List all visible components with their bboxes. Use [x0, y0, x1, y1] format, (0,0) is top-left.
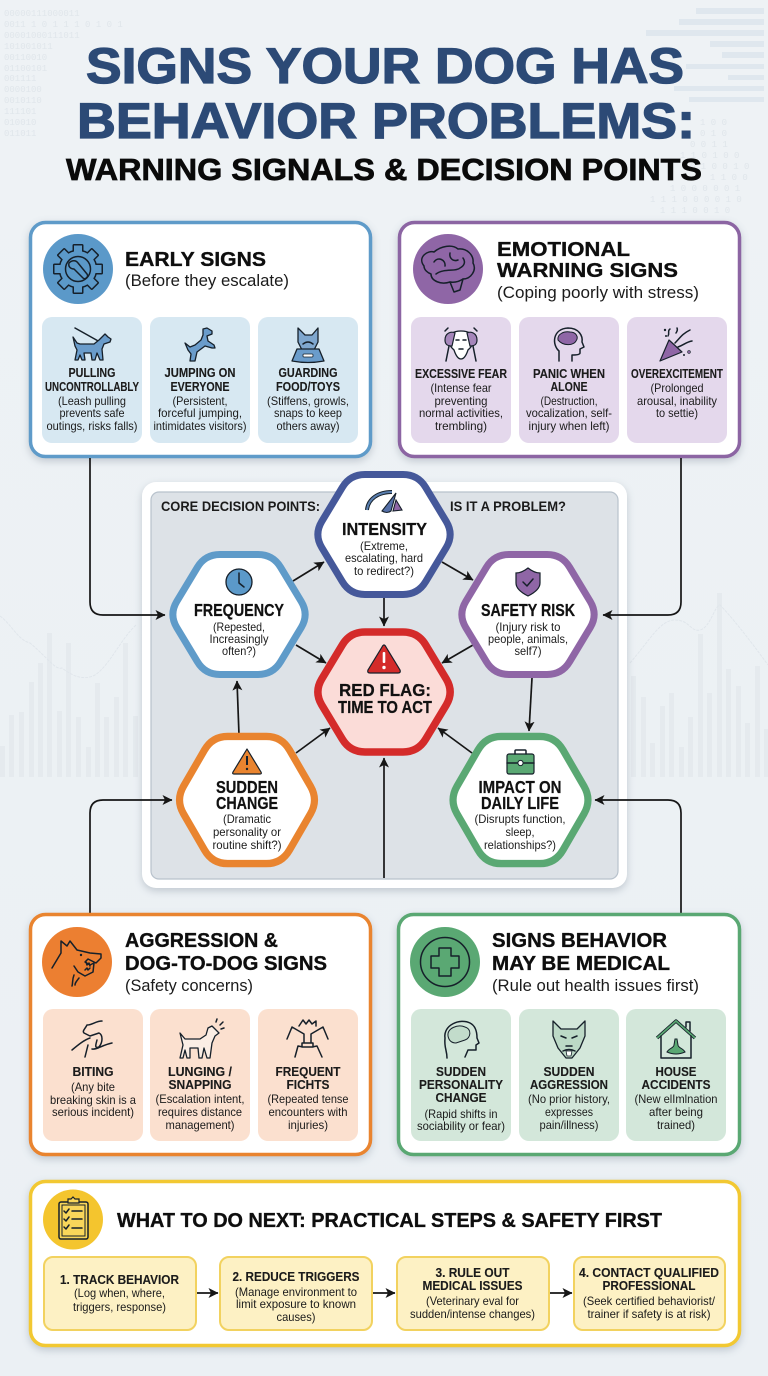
icon: orange warning triangle: [233, 749, 261, 774]
icon: red warning triangle: [368, 645, 400, 673]
tile: jumping on everyone: JUMPING ON: [164, 366, 236, 380]
tile: house accidents: ACCIDENTS: [642, 1078, 710, 1092]
background: 0 1 0 0 1 0: [690, 162, 749, 172]
hexagon: red flag: RED FLAG:: [339, 680, 431, 700]
tile: guarding food/toys: others away): [276, 419, 340, 433]
background: 0 1 0: [700, 129, 727, 139]
background: 1 0 0 0 0 0 1: [670, 184, 740, 194]
hexagon: sudden change: CHANGE: [216, 793, 278, 813]
heading: medical: SIGNS BEHAVIOR: [492, 929, 667, 952]
tile: sudden aggression: AGGRESSION: [530, 1078, 608, 1092]
icon: brain: [413, 234, 483, 304]
icon: jumping dog: [185, 328, 215, 361]
step 1: (Log when, where,: [74, 1286, 165, 1300]
tile: lunging / snapping: SNAPPING: [168, 1078, 232, 1092]
heading: emotional warning signs: WARNING SIGNS: [497, 259, 678, 282]
tile: excessive fear: [411, 317, 511, 443]
tile: house accidents: (New elImlnation: [634, 1092, 718, 1106]
heading: medical: (Rule out health issues first): [492, 977, 699, 995]
hexagon: frequency: FREQUENCY: [194, 600, 284, 620]
step 4: PROFESSIONAL: [602, 1279, 696, 1293]
panel: early signs: [30, 222, 370, 456]
tile: lunging / snapping: (Escalation intent,: [156, 1092, 244, 1106]
tile: pulling uncontrollably: outings, risks falls): [46, 419, 138, 433]
hexagon: sudden change: (Dramatic: [223, 812, 271, 826]
icon: scared dog face: [445, 328, 477, 361]
tile: overexcitement: (Prolonged: [650, 381, 704, 395]
step 4: (Seek certified behaviorist/: [583, 1294, 716, 1308]
tile: frequent fights: encounters with: [268, 1105, 348, 1119]
background: 001111: [4, 74, 36, 84]
tile: sudden personality change: PERSONALITY: [419, 1078, 504, 1092]
tile: sudden aggression: expresses: [545, 1105, 593, 1119]
arrows between decision points: [237, 562, 532, 878]
tile: sudden personality change: sociability or fear): [417, 1119, 505, 1133]
tile: lunging / snapping: management): [166, 1118, 234, 1132]
icon: head with brain: [555, 328, 584, 361]
hexagon: impact on daily life: sleep,: [506, 825, 534, 839]
background: 1 0 0: [700, 118, 727, 128]
tile: panic when alone: vocalization, self-: [526, 406, 612, 420]
tile: biting: serious incident): [52, 1105, 134, 1119]
tile: jumping on everyone: forceful jumping,: [158, 406, 242, 420]
tile: house accidents: [626, 1009, 726, 1141]
tile: sudden aggression: (No prior history,: [528, 1092, 610, 1106]
tile: excessive fear: preventing: [434, 394, 488, 408]
arrow: step 3 to 4: [550, 1292, 572, 1294]
tile: guarding food/toys: snaps to keep: [274, 406, 342, 420]
hexagon: red flag: [318, 632, 450, 752]
step 1: triggers, response): [73, 1300, 166, 1314]
tile: excessive fear: (Intense fear: [430, 381, 492, 395]
hexagon: impact on daily life: IMPACT ON: [478, 777, 562, 797]
step 3: sudden/intense changes): [410, 1307, 535, 1321]
heading: is it a problem: IS IT A PROBLEM?: [450, 498, 566, 514]
tile: sudden personality change: [411, 1009, 511, 1141]
hexagon: intensity: [318, 474, 450, 594]
hexagon: sudden change: routine shift?): [212, 838, 282, 852]
icon: gear with wrench: [43, 234, 113, 304]
background: 010010: [4, 118, 36, 128]
step 2: limit exposure to known: [236, 1297, 356, 1311]
heading: emotional warning signs: EMOTIONAL: [497, 238, 630, 261]
heading: aggression: [125, 929, 327, 995]
tile: house accidents: HOUSE: [656, 1065, 696, 1079]
tile: panic when alone: (Destruction,: [540, 394, 598, 408]
tile: lunging / snapping: [150, 1009, 250, 1141]
heading: medical: MAY BE MEDICAL: [492, 952, 670, 975]
hexagon: impact on daily life: (Disrupts function,: [474, 812, 566, 826]
tile: overexcitement: OVEREXCITEMENT: [631, 367, 723, 381]
panel: what to do next: [30, 1182, 740, 1346]
hexagon: safety risk: self7): [514, 644, 542, 658]
step 2: 2. REDUCE TRIGGERS: [232, 1270, 360, 1284]
step 3: (Veterinary eval for: [426, 1294, 519, 1308]
icon: snarling dog: [42, 927, 112, 997]
tile: lunging / snapping: LUNGING /: [168, 1065, 233, 1079]
background: 0000100: [4, 85, 42, 95]
icon: bite on arm: [72, 1021, 112, 1057]
hexagon: frequency: (Repested,: [213, 620, 265, 634]
step 3: MEDICAL ISSUES: [422, 1279, 522, 1293]
background: 0010110: [4, 96, 42, 106]
title: WARNING SIGNALS & DECISION POINTS: [66, 153, 702, 187]
heading: early signs: [125, 248, 289, 290]
heading: core decision points: CORE DECISION POINTS:: [161, 498, 320, 514]
hexagon: intensity: INTENSITY: [342, 519, 427, 539]
icon: medical cross: [410, 927, 480, 997]
icon: clock: [226, 569, 252, 595]
heading: aggression: AGGRESSION &: [125, 929, 278, 952]
background: 00000111000011: [4, 9, 80, 19]
hexagon: intensity: to redirect?): [354, 564, 414, 578]
hexagon: impact on daily life: DAILY LIFE: [481, 793, 559, 813]
panel: core decision points: [142, 474, 627, 888]
tile: overexcitement: [627, 317, 727, 443]
hexagon: sudden change: SUDDEN: [216, 777, 278, 797]
connector arrows from cards to core panel: [90, 458, 681, 913]
tile: pulling uncontrollably: PULLING: [68, 366, 116, 380]
step 4: trainer if safety is at risk): [588, 1307, 711, 1321]
heading: emotional warning signs: [497, 238, 699, 302]
tile: biting: [43, 1009, 143, 1141]
hexagon: sudden change: [180, 736, 314, 864]
step 1: [44, 1257, 196, 1330]
title: [66, 38, 702, 187]
hexagon: safety risk: [462, 554, 594, 674]
tile: excessive fear: trembling): [435, 419, 487, 433]
icon: two dogs fighting: [287, 1020, 328, 1057]
tile: panic when alone: ALONE: [550, 380, 588, 394]
tile: excessive fear: EXCESSIVE FEAR: [415, 367, 507, 381]
icon: head with green brain: [445, 1021, 479, 1058]
tile: excessive fear: normal activities,: [419, 406, 503, 420]
step 2: (Manage environment to: [235, 1285, 357, 1299]
icon: shield: [516, 568, 540, 596]
arrow: step 2 to 3: [373, 1292, 395, 1294]
tile: panic when alone: PANIC WHEN: [533, 367, 605, 381]
tile: frequent fights: (Repeated tense: [268, 1092, 349, 1106]
icon: party popper: [660, 328, 692, 361]
background: 00001000111011: [4, 31, 80, 41]
hexagon: frequency: Increasingly: [210, 632, 268, 646]
tile: house accidents: trained): [657, 1118, 695, 1132]
step 4: 4. CONTACT QUALIFIED: [579, 1266, 719, 1280]
step 1: 1. TRACK BEHAVIOR: [60, 1273, 179, 1287]
tile: frequent fights: FICHTS: [286, 1078, 330, 1092]
step 2: [220, 1257, 372, 1330]
tile: sudden personality change: (Rapid shifts in: [424, 1107, 498, 1121]
step 3: [397, 1257, 549, 1330]
icon: clipboard checklist: [43, 1190, 103, 1250]
tile: biting: breaking skin is a: [50, 1093, 136, 1107]
icon: gauge: [367, 492, 402, 512]
heading: aggression: DOG-TO-DOG SIGNS: [125, 952, 327, 975]
tile: sudden aggression: [519, 1009, 619, 1141]
tile: panic when alone: injury when left): [528, 419, 610, 433]
tile: overexcitement: arousal, inability: [637, 394, 717, 408]
hexagon: frequency: often?): [222, 644, 256, 658]
background: 0011 1 0 1 1 1 0 1 0 1: [4, 20, 123, 30]
hexagon: impact on daily life: [453, 736, 588, 864]
hexagon: intensity: (Extreme,: [360, 539, 408, 553]
icon: house with puddle: [657, 1021, 695, 1058]
tile: pulling uncontrollably: prevents safe: [60, 406, 125, 420]
tile: sudden aggression: pain/illness): [540, 1118, 598, 1132]
tile: biting: BITING: [72, 1065, 114, 1079]
background: 00110010: [4, 53, 47, 63]
hexagon: frequency: [173, 554, 305, 674]
tile: lunging / snapping: requires distance: [158, 1105, 242, 1119]
tile: pulling uncontrollably: [42, 317, 142, 443]
tile: sudden personality change: CHANGE: [436, 1091, 486, 1105]
heading: what to do next: WHAT TO DO NEXT: PRACTICAL STEPS & SAFETY FIRST: [117, 1209, 662, 1232]
background: 01100101: [4, 64, 47, 74]
tile: guarding food/toys: GUARDING: [278, 366, 338, 380]
tile: guarding food/toys: [258, 317, 358, 443]
icon: lunging dog: [180, 1019, 224, 1058]
step 2: causes): [276, 1310, 316, 1324]
tile: frequent fights: [258, 1009, 358, 1141]
hexagon: safety risk: people, animals,: [488, 632, 568, 646]
icon: dog and bowl: [292, 328, 324, 362]
arrow: step 1 to 2: [197, 1292, 218, 1294]
heading: early signs: EARLY SIGNS: [125, 248, 266, 271]
step 4: [574, 1257, 725, 1330]
hexagon: safety risk: SAFETY RISK: [481, 600, 575, 620]
background: 111101: [4, 107, 36, 117]
hexagon: sudden change: personality or: [213, 825, 281, 839]
heading: early signs: (Before they escalate): [125, 272, 289, 290]
hexagon: red flag: TIME TO ACT: [338, 697, 432, 717]
icon: briefcase: [507, 750, 534, 774]
tile: jumping on everyone: intimidates visitors): [154, 419, 246, 433]
panel: aggression and dog-to-dog signs: [30, 914, 370, 1154]
tile: pulling uncontrollably: (Leash pulling: [58, 394, 126, 408]
title: SIGNS YOUR DOG HAS: [86, 38, 684, 94]
tile: panic when alone: [519, 317, 619, 443]
tile: jumping on everyone: (Persistent,: [172, 394, 228, 408]
step 3: 3. RULE OUT: [436, 1266, 510, 1280]
panel: signs behavior may be medical: [398, 914, 740, 1154]
panel: emotional warning signs: [400, 222, 740, 456]
tile: guarding food/toys: FOOD/TOYS: [276, 380, 340, 394]
background: 101001011: [4, 42, 53, 52]
icon: dog on leash: [73, 328, 111, 360]
hexagon: intensity: escalating, hard: [345, 551, 423, 565]
tile: overexcitement: to settie): [656, 406, 698, 420]
hexagon: safety risk: (Injury risk to: [496, 620, 561, 634]
heading: medical: [492, 929, 699, 995]
background: 011011: [4, 129, 36, 139]
hexagon: impact on daily life: relationships?): [484, 838, 556, 852]
background: 1 1 1 0 0 0 0 1 0: [650, 195, 742, 205]
tile: biting: (Any bite: [71, 1080, 115, 1094]
background: 1 1 1 0 0 1 0: [660, 206, 730, 216]
background: 0 0 1 1: [690, 140, 728, 150]
tile: guarding food/toys: (Stiffens, growls,: [267, 394, 349, 408]
tile: pulling uncontrollably: UNCONTROLLABLY: [45, 380, 140, 394]
tile: sudden aggression: SUDDEN: [544, 1065, 594, 1079]
icon: snarling dog face: [553, 1021, 585, 1058]
tile: frequent fights: FREQUENT: [276, 1065, 341, 1079]
tile: jumping on everyone: EVERYONE: [170, 380, 230, 394]
heading: aggression: (Safety concerns): [125, 977, 253, 995]
background: 1 1 0 1 0 0: [680, 151, 739, 161]
tile: jumping on everyone: [150, 317, 250, 443]
tile: frequent fights: injuries): [288, 1118, 328, 1132]
background: 1 1 0 0: [710, 173, 748, 183]
tile: sudden personality change: SUDDEN: [436, 1065, 486, 1079]
tile: house accidents: after being: [649, 1105, 703, 1119]
title: BEHAVIOR PROBLEMS:: [77, 93, 695, 149]
heading: emotional warning signs: (Coping poorly with stress): [497, 284, 699, 302]
